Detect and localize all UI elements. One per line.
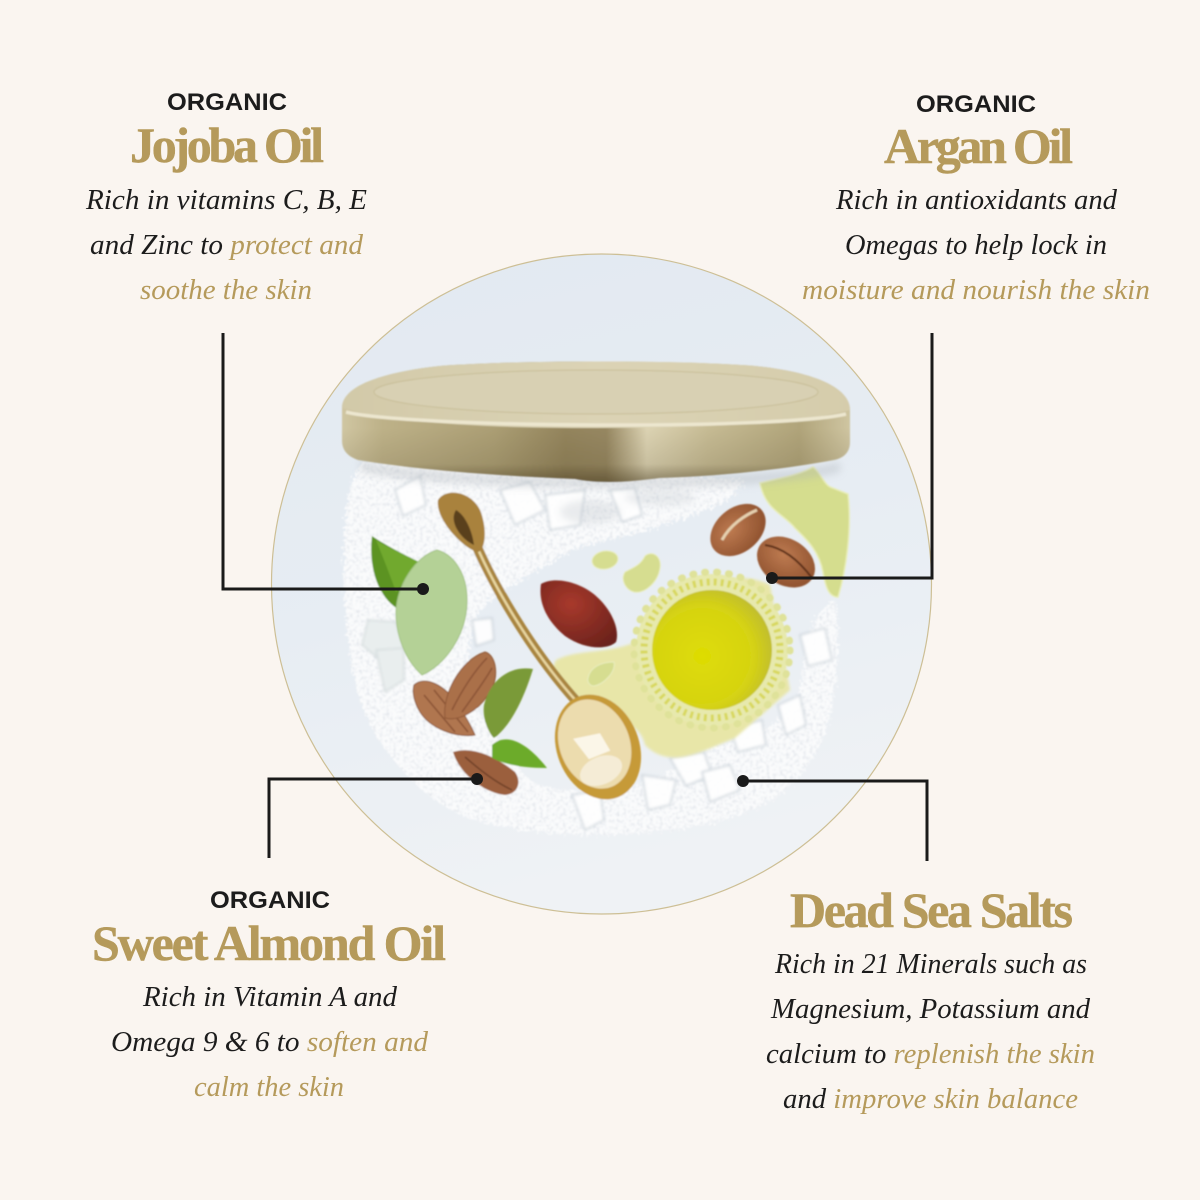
description: calm the skin bbox=[194, 1071, 344, 1103]
lid inner ring bbox=[374, 370, 818, 414]
description: Magnesium, Potassium and bbox=[770, 993, 1090, 1025]
description bbox=[766, 948, 1095, 1115]
salt mound bbox=[344, 462, 838, 835]
description: and Zinc to protect and bbox=[90, 229, 363, 261]
description: Rich in Vitamin A and bbox=[142, 981, 397, 1013]
heading: Argan Oil bbox=[884, 118, 1073, 174]
description: Rich in antioxidants and bbox=[835, 184, 1117, 216]
description: Omega 9 & 6 to soften and bbox=[111, 1026, 428, 1058]
jar lid bbox=[342, 362, 850, 489]
heading: Dead Sea Salts bbox=[790, 882, 1073, 938]
description: and improve skin balance bbox=[783, 1083, 1078, 1115]
panel: dead sea salts bbox=[766, 882, 1095, 1115]
green jojoba sponge bbox=[396, 550, 467, 675]
almond upper bbox=[445, 652, 496, 719]
green leaf centre bbox=[484, 668, 533, 738]
translucent crystals left bbox=[362, 620, 404, 692]
label organic: ORGANIC bbox=[167, 89, 287, 116]
heading: Jojoba Oil bbox=[130, 117, 324, 173]
description: Omegas to help lock in bbox=[845, 229, 1107, 261]
argan nut right bbox=[748, 526, 824, 598]
lid shadow bbox=[360, 460, 840, 489]
green sponge leaves bbox=[371, 536, 419, 610]
plate circle bbox=[272, 254, 932, 914]
connector: almond bbox=[269, 773, 483, 858]
almond bottom bbox=[453, 750, 518, 795]
description bbox=[111, 981, 428, 1103]
lid lip highlight bbox=[346, 412, 846, 425]
label organic: ORGANIC bbox=[210, 887, 330, 914]
panel: sweet almond oil bbox=[92, 887, 446, 1103]
connector: jojoba bbox=[223, 333, 429, 595]
description bbox=[85, 184, 367, 306]
connector: argan bbox=[766, 333, 932, 584]
gold spoon bbox=[438, 493, 656, 812]
salt crystals bbox=[395, 476, 832, 830]
description: soothe the skin bbox=[140, 274, 312, 306]
lid top bbox=[342, 362, 850, 428]
grey salt shade bbox=[560, 491, 696, 524]
heading: Sweet Almond Oil bbox=[92, 915, 446, 971]
product photo circle bbox=[272, 254, 932, 914]
connector: salts bbox=[737, 775, 927, 861]
oil droplets bbox=[588, 549, 660, 686]
oil puddle bbox=[553, 578, 790, 757]
lid side bbox=[342, 362, 850, 482]
photo contents bbox=[344, 462, 849, 835]
description: moisture and nourish the skin bbox=[802, 274, 1150, 306]
description: Rich in vitamins C, B, E bbox=[85, 184, 367, 216]
almond left bbox=[413, 681, 475, 736]
description: calcium to replenish the skin bbox=[766, 1038, 1095, 1070]
argan nut left bbox=[700, 493, 776, 567]
panel: jojoba oil bbox=[85, 89, 367, 306]
label organic: ORGANIC bbox=[916, 91, 1036, 118]
spoon bowl with salt bbox=[540, 682, 656, 812]
description: Rich in 21 Minerals such as bbox=[774, 948, 1087, 980]
glass bowl of oil bbox=[634, 572, 790, 728]
oil smear top right bbox=[760, 467, 849, 597]
description bbox=[802, 184, 1150, 306]
red jojoba bean bbox=[540, 580, 617, 647]
panel: argan oil bbox=[802, 91, 1150, 306]
green leaf lower bbox=[492, 739, 547, 768]
